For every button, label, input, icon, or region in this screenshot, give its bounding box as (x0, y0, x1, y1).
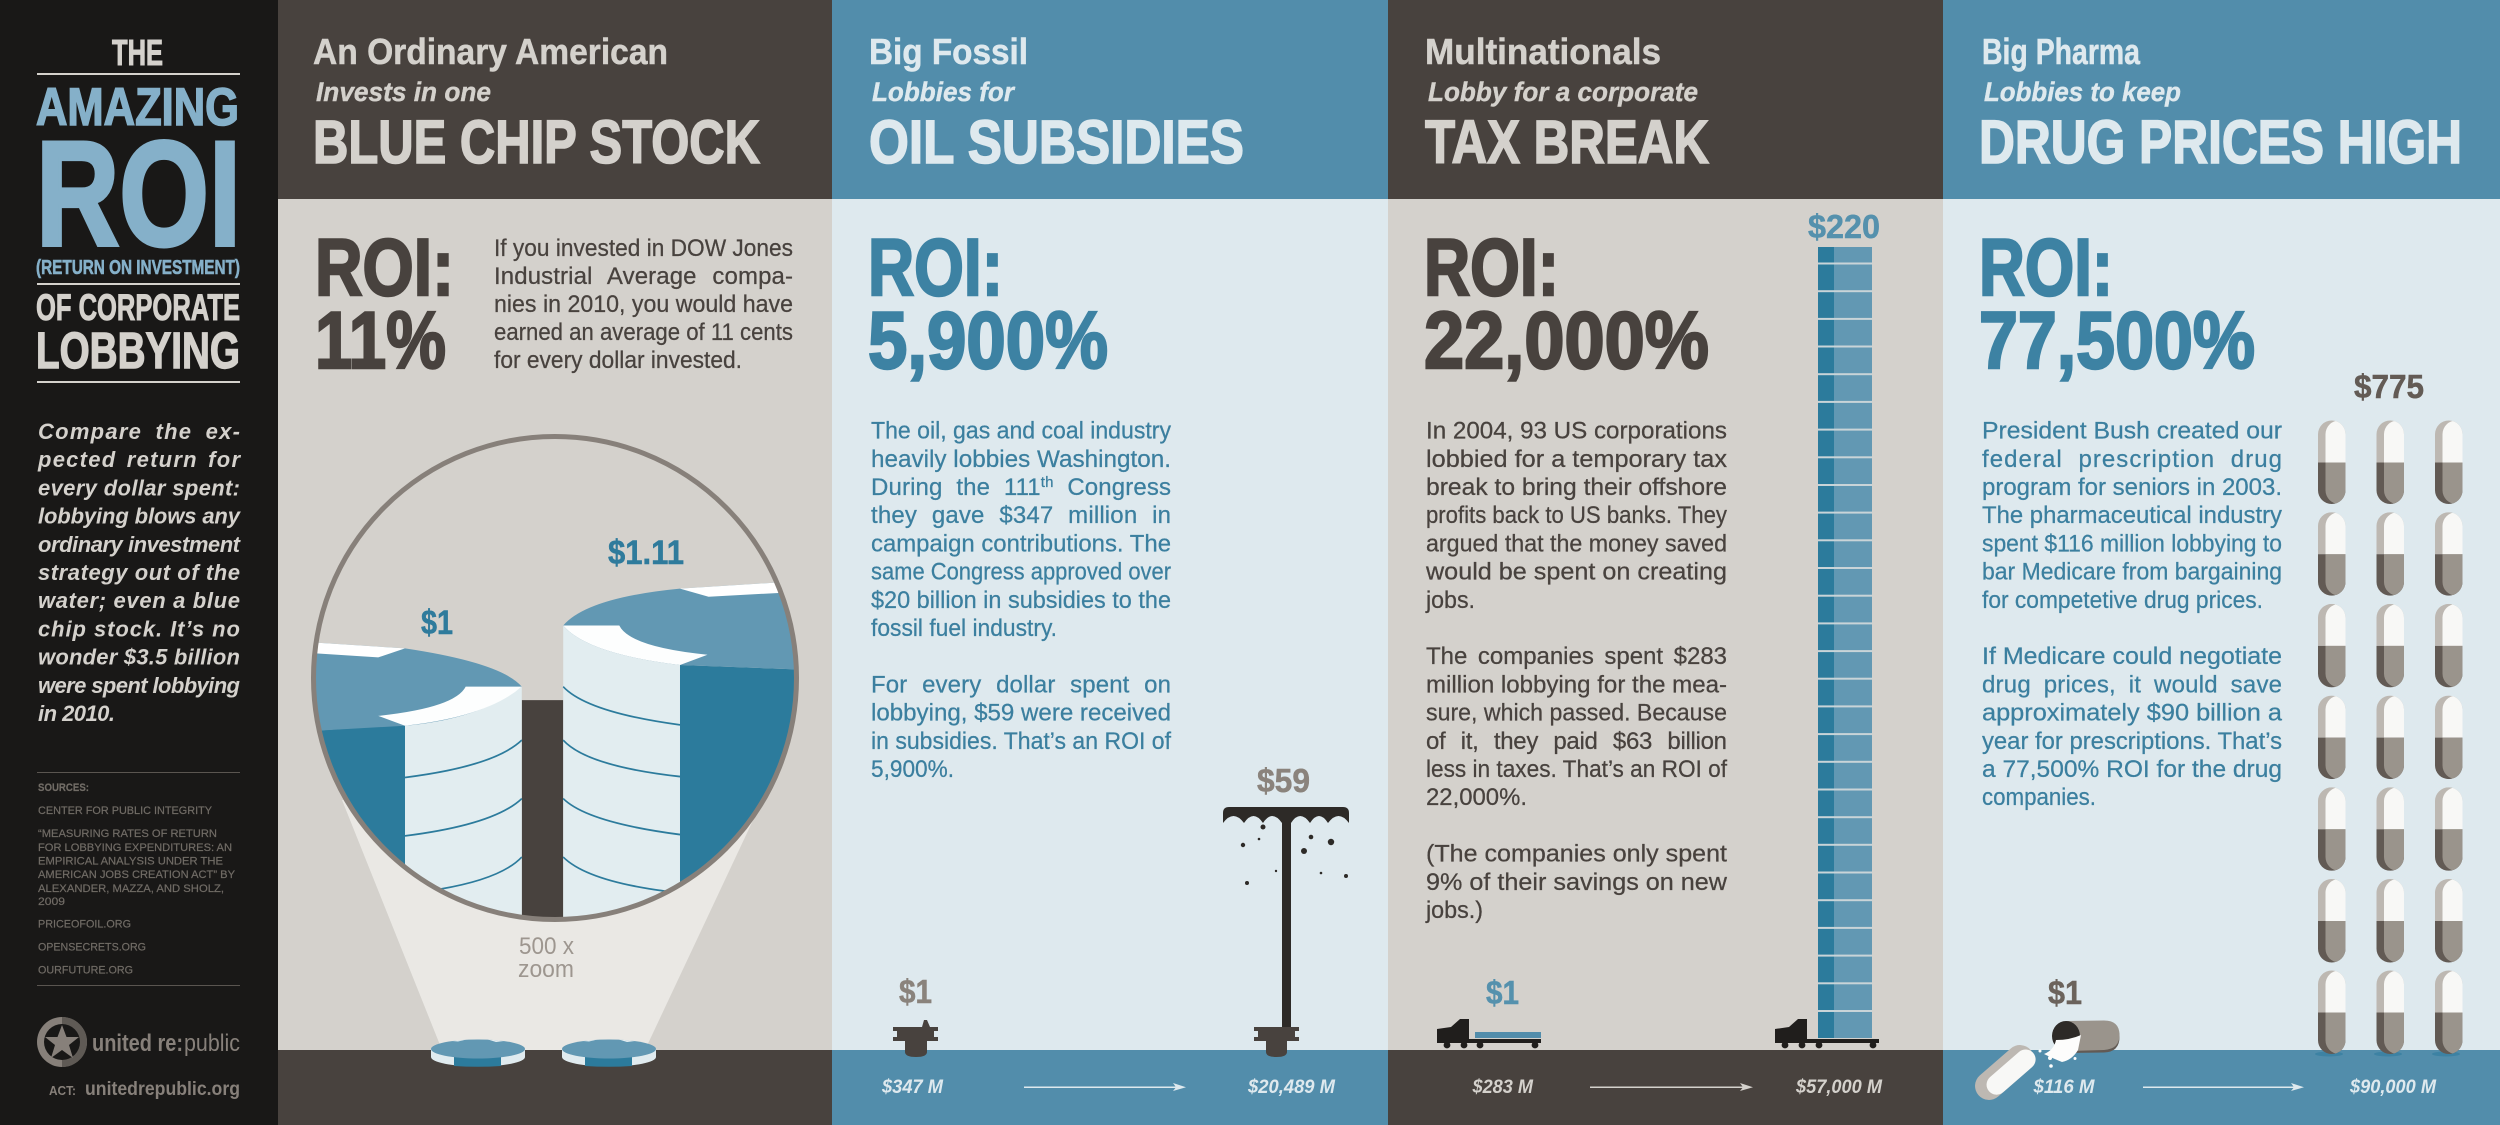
panel 3 body text: of it, they paid $63 billion (1426, 728, 1727, 755)
logo: united republic: public (184, 1030, 240, 1057)
panel 4 body text: drug prices, it would save (1982, 671, 2282, 698)
sources: ALEXANDER, MAZZA, AND SHOLZ, (38, 883, 224, 895)
label: 500x zoom: 500 x (519, 933, 574, 960)
panel 3 body text: would be spent on creating (1425, 559, 1727, 586)
panel 1 heading: An Ordinary American (313, 31, 668, 72)
sidebar title: AMAZING (36, 78, 239, 137)
icon: oil gusher (1223, 807, 1349, 1057)
panel 3 body text: less in taxes. That’s an ROI of (1426, 756, 1727, 783)
panel 4 body text: If Medicare could negotiate (1982, 643, 2282, 670)
label: $1 oil: $1 (899, 973, 932, 1010)
panel 2 body text: heavily lobbies Washington. (871, 446, 1171, 473)
sidebar intro text: every dollar spent: (38, 475, 240, 500)
sources: SOURCES: (38, 782, 89, 794)
panel 3 heading: TAX BREAK (1425, 108, 1709, 176)
panel 4 body text: President Bush created our (1982, 418, 2282, 445)
sidebar (0, 0, 278, 1125)
panel 4 body text: companies. (1982, 784, 2096, 811)
panel 2 body text: For every dollar spent on (871, 671, 1171, 698)
panel 2 body text: $20 billion in subsidies to the (871, 587, 1171, 614)
icon: spilled open capsule (1969, 1020, 2120, 1106)
panel 4 body text: bar Medicare from bargaining (1982, 559, 2282, 586)
icon: truck with one bill (1437, 1019, 1541, 1048)
sidebar intro text (37, 419, 242, 726)
panel 1 body text: for every dollar invested. (494, 347, 742, 374)
panel 2 heading (869, 31, 1244, 176)
panel 3 body text: break to bring their offshore (1426, 474, 1727, 501)
icon: pill grid (2315, 420, 2462, 1056)
sidebar title: LOBBYING (36, 322, 240, 379)
footer: tax amounts (1472, 1077, 1883, 1098)
panel 2 heading: Lobbies for (872, 77, 1015, 107)
panel 3 body text: sure, which passed. Because (1426, 700, 1727, 727)
magnifier ring (314, 436, 796, 920)
panel 3 body text: million lobbying for the mea- (1426, 671, 1727, 698)
panel 2 body text: in subsidies. That’s an ROI of (871, 728, 1171, 755)
panel 4 body text (1982, 418, 2283, 811)
panel 1 body text: nies in 2010, you would have (494, 291, 793, 318)
panel 3 body text: 22,000%. (1426, 784, 1527, 811)
sidebar intro text: water; even a blue (38, 588, 240, 613)
panel 2 ROI: ROI: (868, 223, 1003, 313)
sidebar intro text: wonder $3.5 billion (38, 645, 240, 670)
footer: tax amounts: $283 M (1472, 1077, 1534, 1098)
icon: tall stack of bills on truck (1775, 247, 1879, 1048)
footer: drug amounts: $90,000 M (2349, 1077, 2437, 1098)
label: 500x zoom (518, 933, 574, 983)
sidebar intro text: were spent lobbying (38, 673, 241, 698)
sources: 2009 (38, 896, 65, 908)
icon: small oil rig (893, 1020, 938, 1057)
sidebar title: (RETURN ON INVESTMENT) (36, 257, 240, 279)
footer: drug amounts: $116 M (2033, 1077, 2096, 1098)
panel 4 body text: federal prescription drug (1982, 446, 2282, 473)
panel 4 body text: a 77,500% ROI for the drug (1982, 756, 2282, 783)
sidebar title: THE (112, 32, 163, 73)
panel: blue chip stock (278, 0, 832, 1125)
panel 2 body text: same Congress approved over (871, 559, 1171, 586)
footer: oil amounts: $20,489 M (1247, 1077, 1336, 1098)
footer: oil amounts: $347 M (881, 1077, 944, 1098)
label: $59: $59 (1257, 762, 1310, 799)
panel 3 body text: argued that the money saved (1426, 530, 1727, 557)
panel 4 body text: for competetive drug prices. (1982, 587, 2263, 614)
panel 4 body text: spent $116 million lobbying to (1982, 530, 2282, 557)
sidebar intro text: pected return for (37, 447, 241, 472)
panel 4 body text: year for prescriptions. That’s (1982, 728, 2282, 755)
panel 1 heading: BLUE CHIP STOCK (313, 108, 760, 176)
label: $1.11 stock: $1.11 (608, 534, 684, 572)
panel 4 body text: The pharmaceutical industry (1982, 502, 2282, 529)
magnified chips (309, 581, 801, 925)
act link: unitedrepublic.org (85, 1079, 240, 1100)
panel 2 body text: fossil fuel industry. (871, 615, 1057, 642)
label: $220: $220 (1808, 208, 1880, 245)
logo: united republic (37, 1017, 240, 1067)
panel 4 heading: Lobbies to keep (1984, 77, 2181, 107)
panel 2 heading: Big Fossil (869, 31, 1028, 72)
panel 3 body text: 9% of their savings on new (1426, 869, 1728, 896)
panel 4 body text: program for seniors in 2003. (1982, 474, 2282, 501)
label: $1 drug: $1 (2048, 974, 2082, 1011)
panel 1 ROI: ROI: (315, 223, 454, 313)
sidebar title: ROI (36, 110, 241, 277)
panel 2 body text: th (1041, 474, 1053, 491)
label: $1 tax: $1 (1486, 974, 1519, 1011)
magnifier beam (342, 800, 755, 1050)
panel: oil subsidies (832, 0, 1388, 1125)
arrow (2143, 1083, 2304, 1091)
panel 3 body text: jobs. (1425, 587, 1475, 614)
sidebar intro text: Compare the ex- (38, 419, 240, 444)
panel: tax break (1388, 0, 1943, 1125)
panel 4 ROI: ROI: (1979, 223, 2113, 313)
arrow (1590, 1083, 1753, 1091)
panel 2 body text: The oil, gas and coal industry (871, 418, 1171, 445)
panel 3 body text: lobbied for a temporary tax (1426, 446, 1727, 473)
panel 3 ROI: ROI: (1424, 223, 1559, 313)
panel 2 ROI: 5,900% (868, 296, 1108, 386)
arrow (1024, 1083, 1186, 1091)
sidebar title: OF CORPORATE (36, 287, 240, 328)
panel 2 body text: 5,900%. (871, 756, 954, 783)
sidebar intro text: in 2010. (38, 701, 115, 726)
sources: OURFUTURE.ORG (38, 964, 133, 976)
panel 1 heading: Invests in one (316, 77, 491, 107)
panel 1 heading (313, 31, 760, 176)
panel 2 ROI (868, 223, 1108, 386)
sidebar title (36, 32, 241, 383)
panel 3 heading: Multinationals (1425, 31, 1661, 72)
panel 3 ROI (1424, 223, 1709, 386)
panel 2 body text: they gave $347 million in (871, 502, 1171, 529)
panel 3 heading: Lobby for a corporate (1428, 77, 1698, 107)
panel 4 body text: approximately $90 billion a (1982, 700, 2283, 727)
panel 4 ROI (1979, 223, 2255, 386)
icon: two poker chips (431, 1040, 656, 1067)
logo: united republic: united re: (92, 1030, 183, 1057)
panel 2 heading: OIL SUBSIDIES (869, 108, 1244, 176)
panel 4 heading: Big Pharma (1982, 31, 2141, 72)
panel 1 ROI (315, 223, 454, 386)
sidebar intro text: lobbying blows any (38, 504, 242, 529)
sidebar intro text: ordinary investment (38, 532, 242, 557)
panel 4 heading (1979, 31, 2462, 176)
panel 2 body text: lobbying, $59 were received (871, 700, 1171, 727)
panel 1 body text: earned an average of 11 cents (494, 319, 793, 346)
sources: AMERICAN JOBS CREATION ACT” BY (38, 869, 236, 881)
panel 1 ROI: 11% (315, 296, 446, 386)
sources: FOR LOBBYING EXPENDITURES: AN (38, 842, 232, 854)
act link: ACT: (49, 1083, 76, 1098)
label: $1 stock: $1 (421, 604, 453, 642)
panel 3 body text (1425, 418, 1728, 924)
label: 500x zoom: zoom (518, 956, 574, 983)
panel 1 body text: Industrial Average compa- (494, 263, 793, 290)
sources: OPENSECRETS.ORG (38, 942, 146, 954)
panel 1 body text (494, 235, 793, 374)
sidebar intro text: chip stock. It’s no (38, 616, 240, 641)
footer: drug amounts (2033, 1077, 2437, 1098)
panel 2 body text: During the 111 (871, 474, 1041, 501)
panel 3 body text: The companies spent $283 (1426, 643, 1727, 670)
panel 1 body text: If you invested in DOW Jones (494, 235, 793, 262)
panel 2 body text: Congress (1054, 474, 1171, 501)
footer: oil amounts (881, 1077, 1336, 1098)
sources: CENTER FOR PUBLIC INTEGRITY (38, 805, 213, 817)
panel 2 body text (871, 418, 1171, 783)
sources: “MEASURING RATES OF RETURN (38, 828, 217, 840)
panel 4 ROI: 77,500% (1979, 296, 2255, 386)
panel: drug prices (1943, 0, 2500, 1125)
sidebar intro text: strategy out of the (38, 560, 240, 585)
sources: PRICEOFOIL.ORG (38, 918, 131, 930)
footer: tax amounts: $57,000 M (1795, 1077, 1883, 1098)
panel 3 body text: jobs.) (1425, 897, 1483, 924)
panel 3 body text: (The companies only spent (1426, 841, 1727, 868)
label: $775: $775 (2354, 368, 2424, 405)
panel 3 body text: In 2004, 93 US corporations (1426, 418, 1727, 445)
panel 2 body text: campaign contributions. The (871, 530, 1171, 557)
panel 3 body text: profits back to US banks. They (1426, 502, 1727, 529)
panel 3 heading (1425, 31, 1709, 176)
panel 3 ROI: 22,000% (1424, 296, 1709, 386)
sources (38, 782, 236, 976)
sources: EMPIRICAL ANALYSIS UNDER THE (38, 856, 223, 868)
